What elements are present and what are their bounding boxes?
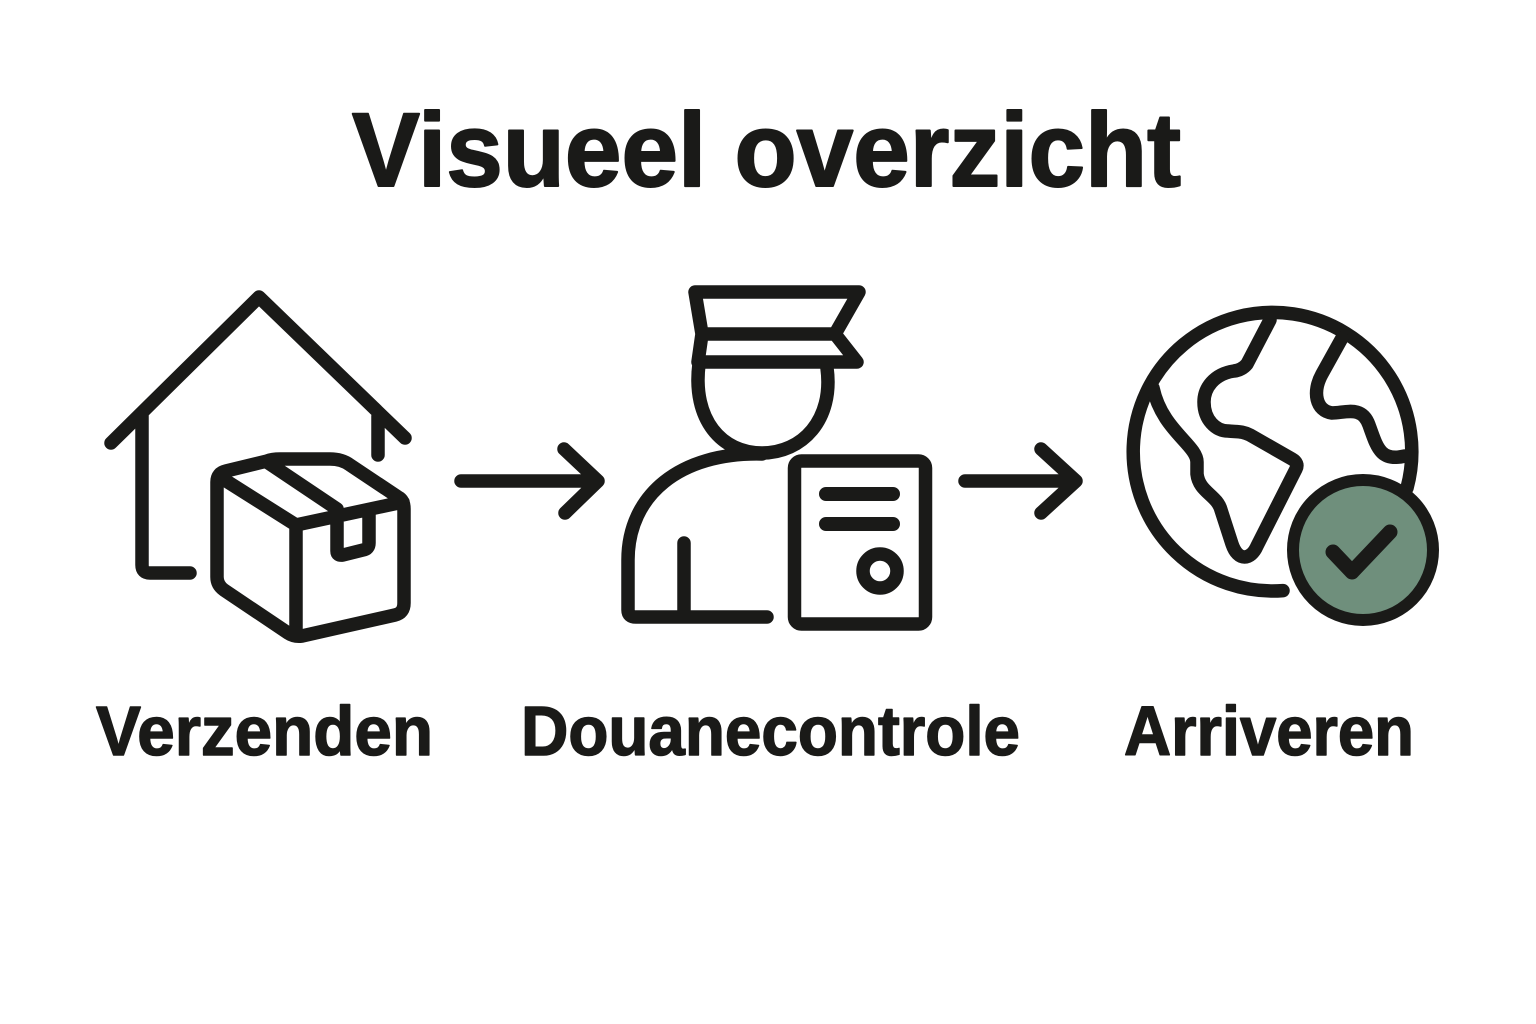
continent left (1153, 320, 1297, 557)
document text lines (826, 494, 893, 524)
officer body (628, 454, 767, 617)
document (794, 461, 926, 624)
icon: house with parcel (111, 297, 405, 636)
officer cap (695, 292, 859, 362)
continent right (1317, 338, 1405, 457)
arrow: shipping to customs (461, 449, 598, 513)
icon: globe with check badge (1133, 312, 1433, 620)
label: Arriveren: Arriveren (1124, 692, 1414, 770)
parcel (217, 459, 404, 636)
label: Verzenden: Verzenden (96, 692, 433, 770)
title: Visueel overzicht (352, 92, 1181, 209)
icon: customs officer with document (628, 292, 926, 624)
arrow: customs to arrival (965, 449, 1076, 513)
globe outline (1133, 312, 1412, 591)
check mark (1333, 532, 1390, 572)
document stamp (863, 554, 897, 588)
check badge (1293, 480, 1433, 620)
house outline (111, 297, 405, 573)
label: Douanecontrole: Douanecontrole (521, 692, 1020, 770)
officer head (698, 364, 828, 453)
